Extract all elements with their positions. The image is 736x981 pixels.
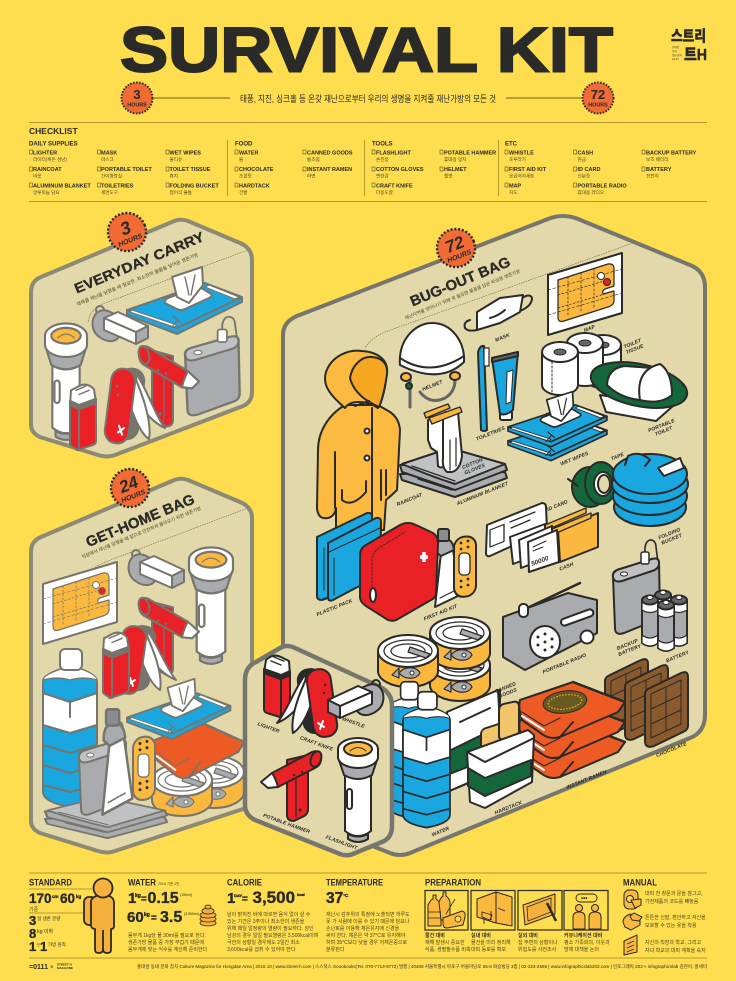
footer logos: STREET H — [57, 962, 72, 966]
label: WHISTLE — [341, 716, 366, 730]
category: etc: CASH — [578, 150, 593, 156]
item: cotton gloves — [424, 404, 462, 472]
label: CANNED — [494, 681, 517, 695]
category: etc: 건전지 — [646, 172, 659, 180]
item: whistle — [328, 680, 383, 718]
badge: 72 hours: 72 — [591, 87, 605, 102]
section: calorie — [227, 878, 318, 953]
checklist — [29, 126, 697, 196]
source note: 2016 기준 1인 — [158, 881, 179, 886]
rule: weight: 8 — [29, 926, 36, 941]
formula: per person: 3.5 — [160, 909, 182, 926]
body text: 하며 35°C보다 낮을 경우 저체온증으로 — [326, 939, 408, 946]
label: FLASHLIGHT — [325, 835, 359, 852]
item: aluminum blanket — [400, 448, 507, 497]
category: etc: BACKUP BATTERY — [646, 150, 697, 156]
item: toilet tissue — [542, 333, 621, 395]
panel: get-home bag — [31, 463, 252, 852]
body text: 못 가 사람에 이를 수 있기 때문에 담요나 — [326, 918, 410, 925]
captions: 물건 대비 — [425, 932, 445, 939]
item: backup battery — [79, 721, 127, 815]
item: instant ramen — [154, 722, 244, 778]
label: FIRST AID KIT — [423, 603, 459, 623]
category: daily supplies: 세면도구 — [101, 189, 118, 196]
category: tools: 다용도칼 — [376, 189, 394, 196]
section: standard — [29, 878, 114, 954]
category: daily supplies: RAINCOAT — [33, 167, 62, 173]
item: wet wipes — [127, 267, 242, 334]
height and weight: 60 — [60, 891, 75, 906]
heading: STANDARD — [29, 878, 72, 888]
captions: 위험도를 사전조사 — [518, 946, 557, 953]
item: raincoat — [317, 351, 400, 530]
formula: DAY — [234, 893, 242, 898]
icon: communication: ••• — [581, 896, 587, 902]
heading: WATER — [128, 878, 156, 888]
body text: 손난로를 이용해 체온유지에 신경을 — [326, 925, 400, 932]
label: CRAFT KNIFE — [299, 735, 334, 753]
captions: 대피 동로를 확보 — [471, 946, 506, 953]
category: etc: ID CARD — [578, 167, 600, 173]
icon: indoor — [471, 890, 515, 930]
category: food: 통조림 — [307, 156, 320, 162]
category: tools: 헬멧 — [444, 172, 452, 180]
badge — [431, 223, 481, 273]
value: °C — [343, 893, 349, 898]
category: daily supplies: ALUMINUM BLANKET — [33, 184, 91, 190]
item: mask — [465, 295, 532, 331]
category: tools: HELMET — [444, 167, 467, 173]
height and weight: cm — [52, 894, 59, 899]
rule: days: 일 생존 분량 — [37, 915, 60, 921]
footer credits: 홍대앞 동네 문화 잡지 Culture Magazine for Hongdae Area | 2016 10 | www.street-h.com | 스스북스 Sooobooks(Tel. 070-7713-9772) 발행 | 40408 서울특별시 마포구 어울마당로 55-8 화승빌딩 3층 | 02-323-2569 | www.infographicslab203.com | 인포그래픽 203 × infographicslab 김현이, 홍세미 — [137, 963, 707, 970]
body text: 날이 밝히진 바에 따르면 음식 없이 살 수 — [227, 911, 311, 918]
height and weight: kg — [76, 894, 82, 899]
category: etc: MAP — [509, 184, 522, 190]
badge: HOURS — [118, 233, 144, 249]
label: BATTERY — [665, 650, 690, 664]
icon: door lock — [624, 890, 641, 909]
category: tools — [372, 142, 496, 196]
rule: days: 3 — [29, 913, 36, 928]
item: canned goods — [378, 617, 490, 701]
panel shape — [245, 646, 392, 855]
item: cash — [510, 508, 598, 572]
item: portable radio — [503, 583, 597, 670]
body text: 있는 기간은 3주이나 최소한의 생존을 — [227, 918, 305, 925]
formula: per kilogram: 0.15 — [148, 890, 179, 907]
captions: 식품, 생필필수품 비축 — [425, 946, 471, 953]
item: flashlight — [338, 738, 378, 842]
formula: per kilogram: (150ml) — [180, 893, 192, 897]
category: food — [235, 142, 353, 195]
height and weight: 170 — [29, 891, 52, 906]
category: etc: 호루라기 — [509, 156, 526, 163]
captions: 실내 대비 — [471, 932, 491, 939]
label: TOILET — [623, 338, 643, 350]
category: food: CHOCOLATE — [239, 167, 274, 173]
formula: = — [242, 894, 248, 905]
label: TOILETRIES — [475, 425, 507, 443]
captions: 집 주변의 상황이나 — [518, 939, 558, 946]
footer logos: MAGAZINE — [57, 966, 73, 970]
category: food: HARDTACK — [239, 184, 270, 190]
heading: CALORIE — [227, 878, 262, 888]
icon: document — [624, 935, 637, 955]
item: potable hammer — [137, 344, 199, 426]
item: tape — [568, 462, 617, 507]
category: daily supplies: PORTABLE TOILET — [101, 167, 152, 173]
heading: PREPARATION — [425, 878, 481, 888]
category: etc: ETC — [505, 142, 518, 148]
text: 가전제품의 코드를 빼놓음 — [645, 898, 699, 905]
section: temperature — [326, 878, 410, 953]
item: wet wipes — [127, 679, 230, 739]
item: first aid kit — [360, 523, 476, 621]
category: tools: 면장갑 — [376, 172, 389, 178]
category: daily supplies: WET WIPES — [170, 150, 201, 156]
item: map — [43, 562, 117, 644]
panel shape — [31, 479, 252, 852]
panel: bug-out bag — [283, 216, 705, 855]
formula: per kilogram: kg — [135, 893, 141, 899]
label: TAPE — [610, 452, 626, 462]
label: PLASTIC PACK — [316, 598, 354, 618]
category: daily supplies: MASK — [101, 150, 117, 156]
icon: communication — [564, 890, 608, 930]
captions: 실외 대비 — [518, 932, 538, 939]
category: daily supplies: 휴지 — [170, 172, 178, 180]
item: whistle — [93, 306, 148, 344]
logo: 트H — [684, 47, 707, 64]
value: 37 — [326, 890, 343, 907]
item: hardtack — [467, 701, 534, 808]
label: TOILET — [654, 425, 674, 438]
category: daily supplies: 알루미늄 담요 — [33, 189, 60, 196]
badge: 72 — [442, 232, 468, 257]
category: daily supplies: DAILY SUPPLIES — [29, 142, 78, 148]
category: daily supplies: 접이식 물통 — [170, 189, 192, 196]
item: box — [447, 690, 500, 792]
checklist heading: CHECKLIST — [29, 126, 78, 136]
body text: 남성의 경우 일일 필요열량은 3,500kcal이며 — [227, 932, 318, 939]
text: 튼튼한 신발, 편안하고 자신을 — [645, 914, 706, 921]
label: RAINCOAT — [396, 492, 424, 508]
label: POTABLE HAMMER — [262, 813, 311, 835]
formula: per kilogram: 1 — [128, 890, 136, 907]
label: ID CARD — [546, 499, 569, 513]
description: 재해를 재난을 당했을 때 필요한, 최소한의 물품을 넣어둔 생존가방 — [76, 251, 200, 308]
badge: 72 hours: HOURS — [588, 102, 608, 108]
icon: supplies — [425, 890, 468, 930]
subtitle: 태풍, 지진, 싱크홀 등 온갖 재난으로부터 우리의 생명을 지켜줄 재난가방의 모든 것 — [240, 93, 496, 104]
title: SURVIVAL KIT — [120, 16, 613, 86]
item: toothpaste — [492, 352, 518, 420]
logo: 문화 잡지 — [672, 53, 682, 57]
body text: 몸무게 1kg당 물 30ml를 필요로 한다. — [128, 932, 206, 939]
category: food: FOOD — [235, 142, 253, 148]
panel: everyday carry — [31, 207, 252, 456]
category: daily supplies: TOILET TISSUE — [170, 167, 211, 173]
item: bandage — [133, 736, 155, 801]
item: craft knife — [114, 625, 176, 695]
category: food: 건빵 — [239, 189, 248, 195]
item: craft knife — [103, 367, 165, 445]
badge: 3 hours — [122, 82, 152, 114]
panel shape — [283, 216, 705, 855]
logo: 스트리 — [671, 28, 706, 45]
badge: 24 — [115, 472, 142, 497]
cash value: 50000 — [530, 555, 550, 568]
item: instant ramen — [519, 682, 625, 778]
captions: 평소 가족회의, 이웃과 — [564, 939, 610, 946]
item: water back — [387, 682, 430, 818]
item: chocolate — [605, 659, 688, 747]
item: helmet — [400, 323, 464, 407]
item: folding bucket — [612, 454, 688, 526]
badge — [102, 207, 152, 257]
captions: 커뮤니케이션 대비 — [564, 932, 603, 939]
icon: stacked water — [200, 905, 216, 926]
category: etc: BATTERY — [646, 167, 672, 173]
item: toothbrush — [478, 346, 489, 431]
category: etc: 지도 — [509, 189, 517, 196]
label: ALUMINUM BLANKET — [455, 481, 510, 508]
icon: person with pack — [84, 878, 114, 953]
captions: 방재 대책을 논의 — [564, 946, 599, 953]
rule: weight: kg 이하 — [37, 928, 54, 935]
icon: outdoor map — [518, 890, 562, 930]
category: etc: 응급처치세트 — [509, 172, 534, 180]
captions: 물건을 미리 정리해 — [471, 939, 511, 946]
body text: 몸무게에 맞는 식수를 계산해 준비한다 — [128, 946, 208, 953]
label: TISSUE — [625, 343, 645, 356]
category: daily supplies: LIGHTER — [33, 150, 57, 156]
label: WET WIPES — [560, 450, 590, 467]
badge: HOURS — [121, 489, 147, 505]
category: tools: COTTON GLOVES — [376, 167, 424, 173]
item: water — [43, 649, 97, 807]
category: etc: 현금 — [578, 156, 586, 162]
label: BATTERY — [618, 643, 643, 658]
label: MASK — [494, 332, 511, 344]
label: MAP — [583, 324, 597, 334]
item: flashlight — [189, 547, 233, 664]
badge: 3 hours: 3 — [133, 87, 141, 102]
formula: per kilogram: = — [141, 894, 147, 905]
heading: GET-HOME BAG — [84, 492, 197, 551]
text: 자신의 직장과 학교, 그리고 — [645, 939, 702, 946]
footer logos: × — [50, 965, 54, 971]
badge: 72 hours — [582, 82, 614, 114]
category: daily supplies: FOLDING BUCKET — [170, 184, 219, 190]
item: battery — [642, 590, 687, 651]
rule: person: 1 — [40, 939, 47, 954]
formula: per person: = — [151, 913, 157, 924]
label: WATER — [431, 826, 451, 838]
description: 재난지역을 벗어나기 위해 꼭 필요한 물품을 담은 비상용 생존가방 — [404, 267, 522, 322]
item: id card — [486, 503, 547, 556]
section: water — [127, 878, 216, 953]
logo: 동네 — [672, 49, 677, 53]
body text: 재난시 감추위의 특정에 노출되면 하루도 — [326, 911, 410, 918]
item: lighter — [264, 656, 290, 718]
label: PORTABLE — [647, 418, 676, 434]
item: portable toilet — [587, 354, 691, 421]
heading: EVERYDAY CARRY — [72, 228, 207, 296]
heading: TEMPERATURE — [326, 878, 383, 888]
logo — [671, 28, 707, 64]
category: tools: 휴대용 망치 — [444, 156, 466, 163]
label: INSTANT RAMEN — [566, 769, 608, 791]
category: food: 라면 — [307, 172, 315, 180]
item: canned goods — [152, 756, 244, 816]
label: BUCKET — [661, 532, 684, 546]
badge: 3 hours: HOURS — [127, 102, 147, 108]
badge — [105, 463, 155, 513]
category: etc: 보조 배터리 — [646, 156, 668, 163]
text: 대피 전 창문과 문을 잠그고, — [645, 890, 703, 897]
badge: HOURS — [447, 249, 473, 265]
item: potable hammer — [137, 596, 199, 675]
rule: person: 1 — [29, 939, 36, 954]
body text: 위해 매일 일정량의 열량이 필요하다. 성인 — [227, 925, 314, 932]
label: HARDTACK — [494, 800, 523, 816]
label: GOODS — [498, 687, 518, 700]
section: manual — [623, 878, 706, 955]
category: daily supplies: 라이터(혹은 성냥) — [33, 156, 67, 163]
text: 자녀 학교의 대피 계획을 숙지 — [645, 947, 706, 954]
category: etc: WHISTLE — [509, 150, 534, 156]
panel: small pocket kit — [245, 646, 392, 855]
category: etc: 휴대용 라디오 — [578, 189, 604, 196]
category: daily supplies: 물티슈 — [170, 156, 182, 163]
label: CHOCOLATE — [655, 741, 688, 759]
formula: per person: kg — [144, 912, 150, 918]
item: flashlight — [45, 323, 87, 440]
category: food: CANNED GOODS — [307, 150, 353, 156]
body text: 3,600kcal를 섭취 수 있어야 한다 — [227, 946, 296, 953]
item: map — [548, 253, 622, 335]
icon: shoes — [623, 913, 642, 930]
item: tube — [102, 709, 132, 815]
footer logos: =0111 — [29, 964, 48, 971]
item: whistle — [129, 550, 184, 588]
category: daily supplies: 간이화장실 — [101, 172, 122, 180]
text: 보호할 수 있는 옷을 착용 — [645, 922, 697, 929]
body text: 분류된다 — [326, 946, 345, 953]
rule: person: 인 — [36, 942, 40, 947]
item: backup battery — [613, 540, 660, 634]
category: tools: FLASHLIGHT — [376, 150, 411, 156]
formula: kcal — [297, 892, 305, 897]
captions: 재해 발생시 중요한 — [425, 939, 465, 946]
item: water — [403, 692, 450, 828]
section: preparation — [425, 878, 610, 953]
category: food: INSTANT RAMEN — [307, 167, 352, 173]
logo: 동대앞 — [672, 45, 680, 49]
formula: 1 — [227, 890, 235, 907]
item: plastic pack — [317, 513, 381, 601]
heading: MANUAL — [623, 878, 657, 888]
label: PORTABLE RADIO — [542, 653, 587, 676]
category: etc — [505, 142, 697, 196]
logo: vol.37 — [672, 58, 679, 61]
footer logos — [29, 962, 73, 971]
category: food: 초콜릿 — [239, 172, 252, 180]
category: tools: POTABLE HAMMER — [444, 150, 496, 156]
panel shape — [31, 220, 252, 456]
basis: 기준 — [29, 906, 39, 913]
rule: person: 가방 원칙 — [48, 941, 66, 948]
item: lighter — [70, 385, 96, 450]
label: GLOVES — [464, 463, 487, 476]
label: COTTON — [461, 457, 484, 471]
category: tools: TOOLS — [372, 142, 393, 148]
description: 직장에서 재난을 당했을 때 집으로 안전하게 돌아오기 위한 생존가방 — [81, 504, 203, 560]
category: etc: PORTABLE RADIO — [578, 184, 627, 190]
category: daily supplies — [29, 142, 219, 196]
category: tools: CRAFT KNIFE — [376, 184, 413, 190]
body text: 써야 한다. 체온은 약 37°C로 유지해야 — [326, 932, 406, 939]
body text: 생존가방 물품 중 가장 무겁기 때문에 — [128, 939, 204, 946]
label: HELMET — [422, 379, 444, 393]
category: tools: 손전등 — [376, 156, 389, 162]
category: daily supplies: 마스크 — [101, 156, 114, 163]
item: potable hammer — [261, 750, 323, 821]
item: craft knife — [277, 668, 339, 738]
label: FOLDING — [658, 527, 682, 541]
formula: 3,500 — [252, 888, 295, 907]
item: backup battery — [185, 317, 240, 415]
category: food: WATER — [239, 150, 258, 156]
item: wet wipes — [508, 392, 607, 461]
category: etc: FIRST AID KIT — [509, 167, 547, 173]
label: CASH — [559, 561, 575, 573]
category: daily supplies: 비옷 — [33, 172, 41, 180]
category: etc: 신분증 — [578, 172, 590, 178]
item: aluminum blanket — [45, 797, 167, 838]
label: BACKUP — [616, 638, 640, 652]
category: food: 물 — [239, 157, 243, 163]
formula: per person: (3,500ml) — [184, 912, 199, 916]
heading: BUG-OUT BAG — [408, 254, 513, 310]
item: lighter — [103, 633, 129, 698]
category: daily supplies: TOILETRIES — [101, 184, 134, 190]
badge: 3 — [117, 217, 134, 239]
body text: 극한의 상황일 경우에도 2일간 최소 — [227, 939, 300, 946]
label: LIGHTER — [257, 721, 280, 735]
formula: per person: 60 — [127, 909, 144, 926]
